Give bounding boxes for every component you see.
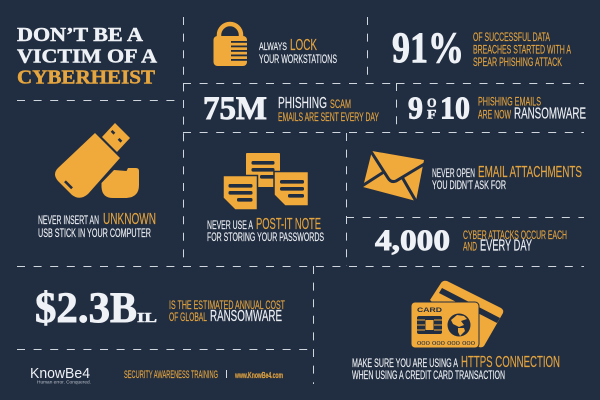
usb text: USB STICK IN YOUR COMPUTER	[38, 226, 151, 240]
stat: $2.3 billion: OF GLOBAL	[169, 310, 207, 324]
title: VICTIM OF A	[17, 46, 158, 68]
post-it text	[207, 216, 324, 244]
logo: KnowBe4: KnowBe4	[30, 365, 90, 382]
icon: envelope	[362, 150, 426, 203]
stat: 75M: SCAM	[330, 97, 351, 111]
stat: $2.3 billion: IS THE ESTIMATED ANNUAL COST	[169, 298, 285, 312]
usb text: NEVER INSERT AN	[38, 215, 99, 227]
stat: 9 of 10: 10	[440, 90, 470, 126]
stat: 75M: 75M	[203, 91, 267, 127]
usb text	[38, 211, 156, 240]
stat: $2.3 billion	[35, 285, 285, 332]
title: DON’T BE A	[17, 24, 144, 46]
stat: 4,000: EVERY DAY	[480, 238, 532, 254]
lock text: LOCK	[290, 37, 317, 54]
stat: 4,000	[375, 224, 567, 257]
stat: 91%	[392, 25, 571, 72]
stat: 9 of 10: ARE NOW	[478, 108, 511, 122]
stat: $2.3 billion: RANSOMWARE	[210, 308, 282, 325]
email text: YOU DIDN’T ASK FOR	[432, 178, 506, 192]
icon: credit cards	[411, 281, 503, 348]
stat: 91%: 91%	[392, 25, 464, 72]
icon: sticky notes	[223, 153, 308, 210]
stat: 9 of 10: O	[427, 95, 436, 110]
stat: 9 of 10: PHISHING EMAILS	[478, 94, 541, 108]
title	[17, 24, 158, 88]
email text	[432, 164, 582, 192]
https text	[352, 354, 560, 382]
post-it text: NEVER USE A	[207, 220, 253, 232]
logo: KnowBe4: Human error. Conquered.	[37, 380, 91, 384]
footer tagline: www.KnowBe4.com	[234, 370, 283, 380]
footer tagline: SECURITY AWARENESS TRAINING	[124, 369, 218, 381]
post-it text: POST-IT NOTE	[256, 216, 321, 233]
lock text: ALWAYS	[259, 41, 287, 53]
stat: 75M	[203, 91, 379, 127]
stat: 4,000: 4,000	[375, 224, 450, 257]
email text: NEVER OPEN	[432, 168, 475, 180]
icon: credit cards: 000 000 000 000	[417, 341, 475, 347]
stat: 4,000: AND	[463, 240, 477, 254]
stat: 75M: EMAILS ARE SENT EVERY DAY	[278, 110, 379, 124]
title: CYBERHEIST	[17, 66, 156, 88]
stat: $2.3 billion: IL	[137, 311, 157, 326]
post-it text: FOR STORING YOUR PASSWORDS	[207, 230, 324, 244]
lock text: YOUR WORKSTATIONS	[259, 52, 337, 66]
icon: usb stick	[55, 123, 139, 198]
https text: MAKE SURE YOU ARE USING A	[352, 358, 458, 370]
lock text	[259, 37, 337, 66]
icon: credit cards: CARD	[417, 308, 443, 314]
icon: padlock	[214, 24, 247, 66]
stat: $2.3 billion: $2.3	[35, 285, 110, 332]
stat: 75M: PHISHING	[278, 95, 327, 112]
stat: 9 of 10: F	[427, 106, 437, 122]
stat: $2.3 billion: B	[110, 285, 137, 332]
stat: 9 of 10: 9	[408, 90, 423, 126]
stat: 9 of 10	[408, 90, 586, 126]
usb text: UNKNOWN	[103, 211, 156, 228]
